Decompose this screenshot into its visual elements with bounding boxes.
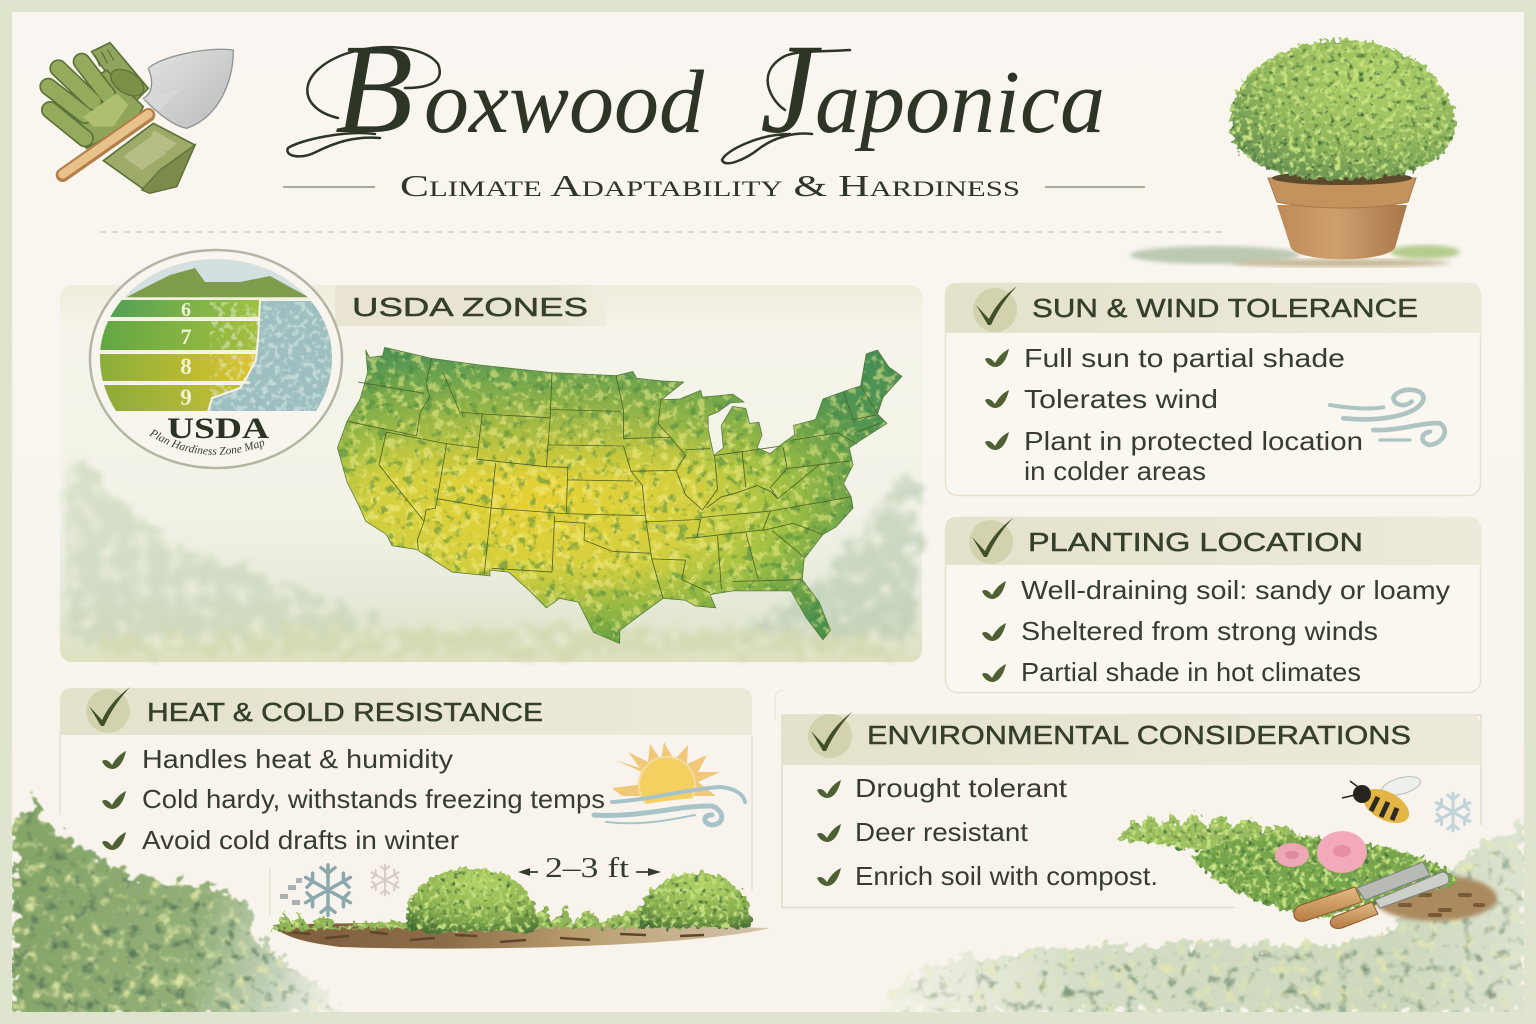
garden tools [1294, 862, 1449, 929]
USDA hardiness badge: 7 [180, 324, 192, 349]
decorative foliage: bottom left [13, 798, 345, 1015]
checklist: Full sun to partial shade [1024, 343, 1345, 373]
icon: gloves and trowel [48, 43, 233, 193]
title: oxwood [424, 53, 705, 152]
header: title block [283, 18, 1145, 203]
USDA hardiness badge: Plan Hardiness Zone Map [149, 429, 264, 455]
heading: PLANTING LOCATION [1028, 527, 1363, 557]
heading tab [335, 285, 607, 326]
map of United States [330, 343, 906, 647]
title: B [335, 18, 413, 160]
checklist: Sheltered from strong winds [1021, 616, 1378, 646]
checklist [817, 773, 1158, 891]
checklist: Deer resistant [855, 817, 1029, 847]
USDA hardiness badge: USDA [167, 412, 269, 445]
panel: heat and cold resistance [60, 687, 770, 949]
checklist: Handles heat & humidity [142, 744, 453, 774]
checklist: Cold hardy, withstands freezing temps [142, 784, 605, 814]
checklist: Drought tolerant [855, 773, 1068, 803]
icon: snowflake [1436, 793, 1470, 831]
USDA hardiness badge [88, 248, 344, 470]
heading: ENVIRONMENTAL CONSIDERATIONS [867, 720, 1411, 750]
checklist: Enrich soil with compost. [855, 861, 1158, 891]
checklist: Plant in protected location [1024, 426, 1363, 456]
checklist: Well-draining soil: sandy or loamy [1021, 575, 1450, 605]
title [287, 18, 1105, 163]
heading [945, 517, 1481, 565]
USDA hardiness badge: 8 [180, 354, 192, 379]
icon: potted boxwood [1130, 40, 1460, 267]
title: aponica [815, 53, 1105, 152]
dimension label: 2-3 ft spacing: 2–3 ft [545, 852, 629, 884]
checklist [985, 343, 1363, 486]
illustration: spaced boxwood shrubs on soil [272, 868, 770, 949]
illustration: garden bed [1117, 773, 1497, 929]
heading [945, 283, 1481, 333]
title: J [760, 18, 822, 160]
checklist: Avoid cold drafts in winter [142, 825, 459, 855]
pink flowers [1275, 831, 1367, 873]
heading: SUN & WIND TOLERANCE [1032, 293, 1418, 323]
decorative foliage: bottom right [880, 825, 1525, 1014]
subtitle: Climate Adaptability & Hardiness [400, 168, 1020, 203]
USDA hardiness badge: 9 [180, 385, 192, 410]
dimension label: 2-3 ft spacing [521, 852, 658, 884]
icon: snowflakes [280, 865, 399, 915]
checklist: Partial shade in hot climates [1021, 657, 1361, 687]
icon: bee [1342, 773, 1422, 830]
heading [782, 712, 1481, 765]
icon: wind swirls [1330, 390, 1445, 445]
icon: sun and waves [594, 742, 745, 825]
panel: planting location [945, 517, 1481, 692]
USDA hardiness badge: 6 [181, 299, 191, 321]
background trees [66, 458, 916, 655]
checklist: Tolerates wind [1024, 384, 1218, 414]
heading: HEAT & COLD RESISTANCE [147, 697, 543, 727]
heading [60, 687, 752, 735]
panel: sun and wind tolerance [945, 283, 1481, 496]
checklist [102, 744, 605, 855]
heading tab: USDA ZONES [352, 292, 588, 322]
checklist: in colder areas [1024, 456, 1206, 486]
checklist [982, 575, 1450, 687]
panel: USDA zones [59, 248, 928, 666]
